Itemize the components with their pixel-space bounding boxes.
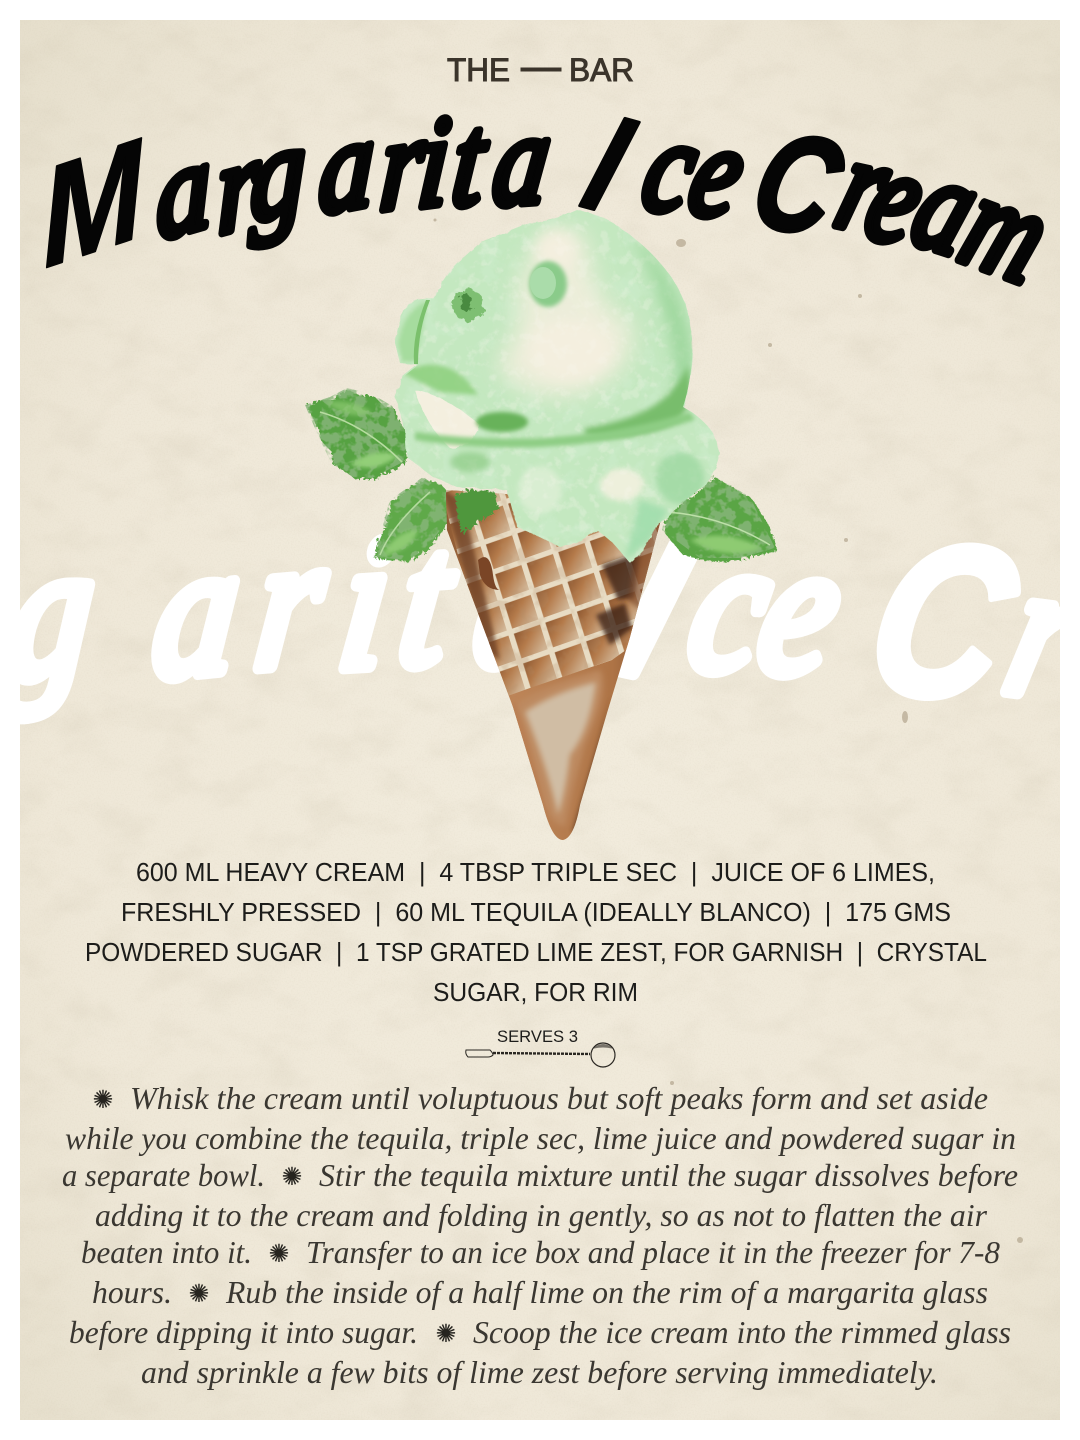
method text: ✺ xyxy=(93,1085,113,1114)
method text: Stir the tequila mixture until the sugar dissolves before xyxy=(319,1157,1018,1193)
method text: Rub the inside of a half lime on the rim of a margarita glass xyxy=(225,1274,988,1310)
icon: small mint leaf xyxy=(453,488,497,533)
illustration: ice cream cone with mint xyxy=(300,205,778,840)
method text: ✺ xyxy=(269,1239,289,1268)
method text: hours. xyxy=(92,1274,172,1310)
ingredients list xyxy=(85,857,987,1007)
method text: Scoop the ice cream into the rimmed glass xyxy=(473,1314,1011,1350)
icon: waffle cone xyxy=(446,490,660,840)
icon: mint leaf lower left xyxy=(373,478,447,564)
ingredients list: POWDERED SUGAR | 1 TSP GRATED LIME ZEST, FOR GARNISH | CRYSTAL xyxy=(85,937,987,967)
method text: ✺ xyxy=(436,1319,456,1348)
title: Margarita Ice Cream: Margarita Ice Cream xyxy=(8,86,1080,311)
method text: Transfer to an ice box and place it in the freezer for 7-8 xyxy=(306,1234,1000,1270)
method text: adding it to the cream and folding in gently, so as not to flatten the air xyxy=(95,1197,988,1233)
method text: while you combine the tequila, triple sec, lime juice and powdered sugar in xyxy=(65,1120,1016,1156)
header: THE BAR xyxy=(447,52,634,88)
icon: mint leaf right xyxy=(660,472,778,562)
icon: ice cream scoop xyxy=(390,205,725,565)
method text xyxy=(62,1080,1018,1390)
method text: beaten into it. xyxy=(81,1234,252,1270)
serves label: SERVES 3 xyxy=(497,1027,578,1046)
icon: bar spoon xyxy=(466,1043,615,1067)
icon: mint leaf left xyxy=(300,385,410,480)
method text: a separate bowl. xyxy=(62,1157,265,1193)
method text: ✺ xyxy=(189,1279,209,1308)
method text: and sprinkle a few bits of lime zest before serving immediately. xyxy=(141,1354,938,1390)
ingredients list: SUGAR, FOR RIM xyxy=(433,977,638,1007)
ingredients list: 600 ML HEAVY CREAM | 4 TBSP TRIPLE SEC | JUICE OF 6 LIMES, xyxy=(136,857,935,887)
header: THE BAR: THE xyxy=(447,52,510,88)
header: THE BAR: BAR xyxy=(569,52,634,88)
method text: before dipping it into sugar. xyxy=(69,1314,418,1350)
method text: Whisk the cream until voluptuous but soft peaks form and set aside xyxy=(130,1080,988,1116)
method text: ✺ xyxy=(282,1162,302,1191)
ingredients list: FRESHLY PRESSED | 60 ML TEQUILA (IDEALLY BLANCO) | 175 GMS xyxy=(121,897,951,927)
